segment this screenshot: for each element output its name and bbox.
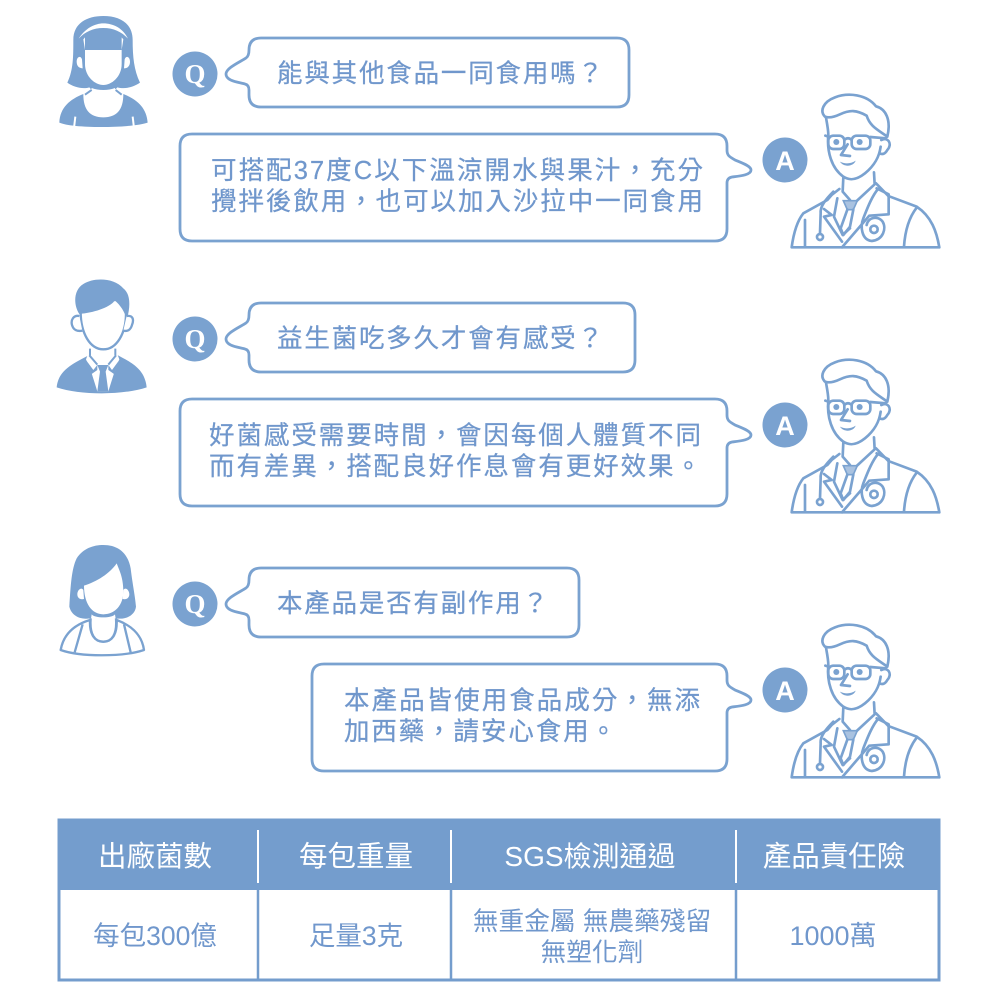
- table header labels: 每包重量: [299, 841, 413, 873]
- bubble: answer 2: 好菌感受需要時間，會因每個人體質不同: [209, 422, 701, 450]
- icon: Q badge 1: Q: [184, 59, 206, 89]
- table header labels: 產品責任險: [763, 841, 905, 873]
- bubble: question 1: [226, 38, 629, 107]
- icon: Q badge 3: [172, 582, 218, 626]
- bubble: answer 2: [180, 399, 751, 506]
- table header labels: 出廠菌數: [98, 841, 212, 873]
- product spec table: [58, 819, 940, 980]
- table header labels: SGS檢測通過: [504, 841, 676, 872]
- bubble: answer 1: [180, 134, 751, 241]
- bubble: answer 3: 加西藥，請安心食用。: [344, 718, 616, 746]
- table values: 足量3克: [309, 921, 403, 951]
- bubble: answer 1: 攪拌後飲用，也可以加入沙拉中一同食用: [211, 188, 703, 216]
- icon: doctor 1: [792, 95, 939, 247]
- person icon: woman with short hair: [61, 545, 144, 655]
- icon: doctor 3: [792, 625, 939, 777]
- table values: 無重金屬 無農藥殘留: [473, 907, 711, 936]
- icon: Q badge 2: [172, 316, 218, 362]
- bubble: answer 3: 本產品皆使用食品成分，無添: [344, 687, 700, 715]
- bubble: question 3: 本產品是否有副作用？: [277, 590, 548, 618]
- icon: Q badge 1: [172, 52, 218, 96]
- bubble: answer 3: [312, 664, 751, 771]
- table values: 1000萬: [789, 921, 877, 951]
- bubble: answer 2: 而有差異，搭配良好作息會有更好效果。: [209, 453, 701, 481]
- icon: A badge 3: A: [775, 676, 795, 706]
- table header labels: [98, 841, 905, 873]
- icon: A badge 1: A: [775, 146, 795, 176]
- person icon: woman with headband: [59, 16, 148, 128]
- icon: A badge 3: [762, 668, 808, 712]
- bubble: question 3: [226, 568, 579, 637]
- person icon: man in suit: [57, 279, 147, 393]
- bubble: question 2: 益生菌吃多久才會有感受？: [277, 325, 603, 353]
- icon: Q badge 3: Q: [184, 589, 206, 619]
- icon: A badge 2: [762, 402, 808, 448]
- icon: Q badge 2: Q: [184, 324, 206, 354]
- bubble: answer 1: 可搭配37度C以下溫涼開水與果汁，充分: [211, 157, 703, 185]
- icon: A badge 2: A: [775, 411, 795, 441]
- bubble: question 2: [226, 303, 635, 372]
- table values: 每包300億: [93, 921, 217, 951]
- table values: [93, 907, 877, 967]
- bubble: question 1: 能與其他食品一同食用嗎？: [277, 60, 603, 88]
- table values: 無塑化劑: [541, 938, 643, 967]
- icon: A badge 1: [762, 138, 808, 182]
- icon: doctor 2: [792, 360, 939, 512]
